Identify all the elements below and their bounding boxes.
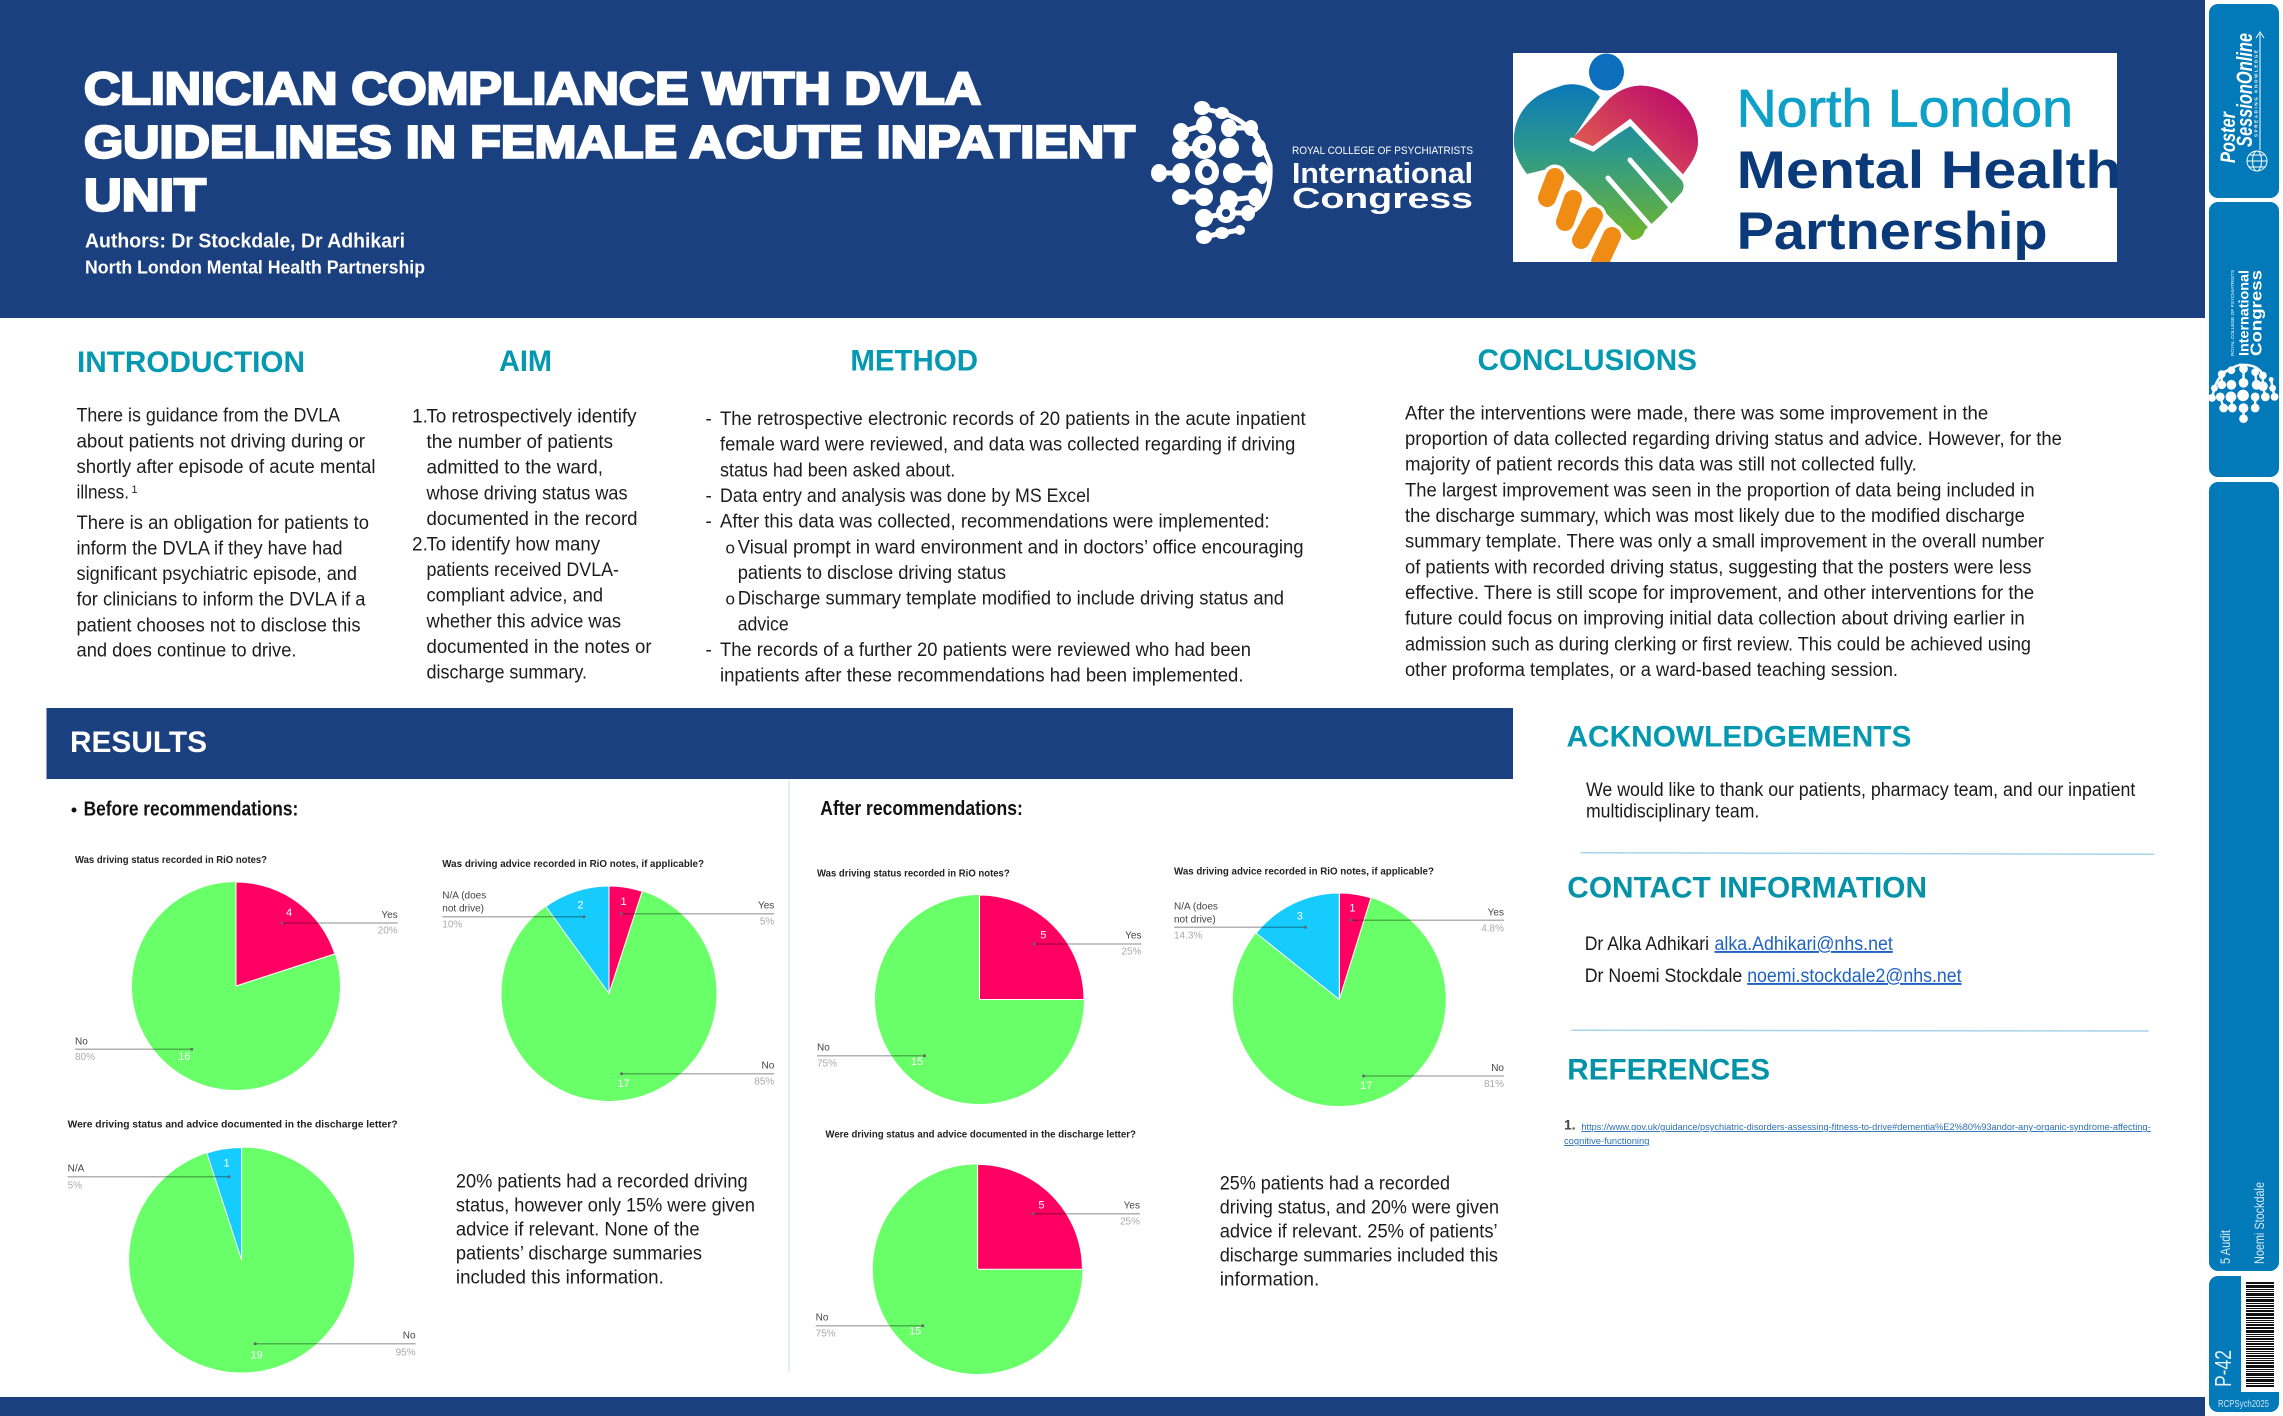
side tab: Poster Session Online (2209, 4, 2279, 198)
logo: RCPsych International Congress (1151, 101, 1473, 244)
text: after summary: discharge summaries included this (1220, 1245, 1498, 1266)
text: conclusions body: the discharge summary, which was most likely due to the modified discharge (1405, 506, 2025, 527)
text: method list: inpatients after these recommendations had been implemented. (720, 666, 1244, 687)
text: method list: - (706, 409, 712, 430)
text: aim list: admitted to the ward, (426, 458, 603, 479)
text: contact details: Dr Noemi Stockdale (1585, 966, 1742, 987)
results banner (46, 708, 1513, 779)
results banner: RESULTS (70, 726, 207, 759)
text: after summary: information. (1220, 1269, 1319, 1290)
side tab: International Congress (2208, 202, 2279, 477)
text: after summary: 25% patients had a recorded (1220, 1173, 1450, 1194)
text: before summary: advice if relevant. None of the (456, 1219, 700, 1240)
chart: before, driving advice recorded (442, 858, 775, 1101)
chart: before, driving advice recorded: 1 (621, 896, 627, 908)
chart: after, discharge letter (816, 1129, 1140, 1374)
text: method list: The retrospective electronic records of 20 patients in the acute inpatient (720, 409, 1306, 430)
poster title: UNIT (84, 170, 206, 221)
text: introduction body: shortly after episode of acute mental (76, 457, 376, 478)
text: conclusions body: After the interventions were made, there was some improvement in the (1405, 403, 1988, 424)
text: aim list: documented in the record (426, 509, 638, 530)
chart: after, discharge letter: Were driving status and advice documented in the discharge letter? (825, 1129, 1136, 1141)
chart: before, driving status recorded: Yes (381, 910, 398, 921)
text: introduction body: patient chooses not to disclose this (76, 615, 360, 636)
panel: acknowledgements: ACKNOWLEDGEMENTS (1566, 721, 1911, 754)
footer band (0, 1397, 2205, 1416)
chart: before, discharge letter: 19 (250, 1349, 263, 1361)
poster title: GUIDELINES IN FEMALE ACUTE INPATIENT (84, 116, 1135, 167)
chart: before, driving advice recorded: No (762, 1061, 775, 1072)
text: method list: female ward were reviewed, and data was collected regarding if driving (720, 435, 1295, 456)
chart: before, driving advice recorded: 5% (760, 917, 774, 928)
chart: after, driving advice recorded: 14.3% (1174, 930, 1202, 941)
chart: before, discharge letter: Were driving status and advice documented in the discharge letter? (68, 1119, 398, 1131)
text: introduction body: There is an obligation for patients to (76, 513, 369, 534)
text: aim list (412, 406, 652, 684)
text: introduction body: about patients not driving during or (76, 431, 366, 452)
logo wordmark: Mental Health (1737, 141, 2122, 200)
chart: before, driving advice recorded: 85% (754, 1077, 774, 1088)
panel: contact information (1567, 871, 1962, 987)
side tab: International Congress: ROYAL COLLEGE OF PSYCHIATRISTS (2230, 270, 2235, 356)
chart: before, driving status recorded: 20% (378, 926, 398, 937)
chart: after, driving status recorded: 15 (911, 1056, 923, 1068)
chart: after, driving advice recorded: not drive) (1174, 915, 1216, 926)
chart: before, driving advice recorded: Was driving advice recorded in RiO notes, if applicable? (442, 858, 704, 870)
text: reference link: cognitive-functioning (1564, 1136, 1649, 1147)
text: after summary: advice if relevant. 25% of patients’ (1220, 1221, 1498, 1242)
text: acknowledgements body (1586, 780, 2136, 822)
icon: handshake heart (1514, 54, 1698, 262)
chart: before, driving advice recorded: N/A (does (442, 891, 486, 902)
heading: after recommendations: After recommendations: (820, 798, 1023, 820)
chart: after, driving advice recorded: 17 (1360, 1080, 1372, 1092)
text: before summary: 20% patients had a recorded driving (456, 1171, 748, 1192)
header banner (0, 0, 2205, 318)
text: aim list: documented in the notes or (426, 637, 652, 658)
text: introduction body: significant psychiatric episode, and (76, 564, 357, 585)
text: method list: o (726, 538, 735, 557)
text: after summary: driving status, and 20% were given (1220, 1197, 1499, 1218)
text: acknowledgements body: We would like to thank our patients, pharmacy team, and our inpatient (1586, 780, 2136, 801)
chart: after, driving status recorded: 25% (1121, 947, 1142, 958)
chart: after, driving advice recorded: N/A (does (1174, 902, 1218, 913)
logo: RCPsych International Congress: ROYAL COLLEGE OF PSYCHIATRISTS (1292, 145, 1473, 157)
text: method list: Data entry and analysis was done by MS Excel (720, 486, 1090, 507)
text: introduction body: inform the DVLA if they have had (76, 539, 342, 560)
text: aim list: To retrospectively identify (426, 406, 637, 427)
barcode (2246, 1282, 2274, 1387)
text: method list: status had been asked about. (720, 460, 955, 481)
text: method list: advice (738, 614, 789, 635)
side tab: International Congress: International (2236, 270, 2252, 356)
logo wordmark: Partnership (1737, 202, 2048, 261)
side tab: poster number and barcode (2209, 1276, 2279, 1412)
chart: after, driving status recorded: 5 (1040, 930, 1046, 942)
text: after summary (1220, 1173, 1499, 1290)
text: aim list: To identify how many (426, 534, 600, 555)
heading: conclusions: CONCLUSIONS (1478, 344, 1697, 377)
text: method list: - (706, 486, 712, 507)
heading: introduction: INTRODUCTION (77, 346, 305, 379)
text: method list: Discharge summary template modified to include driving status and (738, 589, 1284, 610)
chart: after, driving advice recorded: 81% (1484, 1079, 1504, 1090)
chart: after, driving advice recorded: 1 (1349, 902, 1355, 914)
text: method list (706, 409, 1306, 687)
logo: RCPsych International Congress: International (1292, 158, 1473, 190)
chart: before, driving status recorded: 4 (286, 907, 292, 919)
heading: aim: AIM (499, 345, 552, 378)
heading: before recommendations: Before recommendations: (84, 799, 298, 821)
text: introduction body (76, 406, 376, 662)
logo: North London Mental Health Partnership (1513, 53, 2122, 262)
chart: after, driving advice recorded: Yes (1488, 907, 1504, 918)
text: method list: patients to disclose driving status (738, 563, 1006, 584)
chart: before, driving advice recorded: 10% (442, 920, 462, 931)
chart: after, driving status recorded (817, 867, 1142, 1104)
text: contact details (1585, 934, 1962, 987)
chart: after, driving advice recorded (1174, 865, 1504, 1106)
text: before summary: included this information. (456, 1267, 664, 1288)
panel: contact information: CONTACT INFORMATION (1567, 871, 1927, 904)
text: conclusions body: summary template. There was only a small improvement in the overall number (1405, 532, 2045, 553)
chart: after, driving advice recorded: Was driving advice recorded in RiO notes, if applicable? (1174, 865, 1434, 877)
text: introduction body: illness. (76, 482, 129, 503)
text: reference link: https://www.gov.uk/guidance/psychiatric-disorders-assessing-fitness-to-drive#dementia%E2%80%93andor-any-organic-syndrome-affecting- (1581, 1122, 2151, 1133)
text: method list: - (706, 640, 712, 661)
text: method list: Visual prompt in ward environment and in doctors’ office encouraging (738, 537, 1304, 558)
authors (85, 230, 425, 277)
chart: before, driving advice recorded: not drive) (442, 903, 484, 914)
text: reference link (1564, 1116, 2151, 1147)
panel: method (706, 345, 1306, 687)
text: conclusions body: effective. There is still scope for improvement, and other interventions for the (1405, 583, 2034, 604)
panel: introduction (76, 346, 376, 662)
chart: before, driving status recorded: No (75, 1037, 88, 1048)
chart: before, driving status recorded: 80% (75, 1052, 95, 1063)
chart: after, driving status recorded: Was driving status recorded in RiO notes? (817, 867, 1010, 879)
chart: after, driving advice recorded: No (1491, 1063, 1504, 1074)
text: aim list: patients received DVLA- (426, 560, 619, 581)
panel: acknowledgements (1566, 721, 2136, 822)
text: aim list: whether this advice was (426, 611, 621, 632)
chart: after, driving advice recorded: 4.8% (1481, 923, 1504, 934)
text: method list: The records of a further 20 patients were reviewed who had been (720, 640, 1251, 661)
side tab: category and author: 5 Audit (2218, 1230, 2233, 1264)
chart: after, driving status recorded: Yes (1125, 931, 1142, 942)
chart: before, driving advice recorded: 17 (617, 1078, 630, 1090)
text: conclusions body: The largest improvement was seen in the proportion of data being included in (1405, 480, 2035, 501)
text: introduction body: and does continue to drive. (76, 641, 296, 662)
chart: after, driving status recorded: 75% (817, 1059, 837, 1070)
text: conclusions body (1405, 403, 2062, 681)
text: aim list: 2. (412, 534, 428, 555)
text: method list: - (706, 512, 712, 533)
text: aim list: the number of patients (426, 432, 613, 453)
chart: before, discharge letter: 5% (68, 1180, 82, 1191)
text: conclusions body: proportion of data collected regarding driving status and advice. However, for the (1405, 429, 2062, 450)
text: contact details: noemi.stockdale2@nhs.net (1747, 966, 1962, 987)
text: conclusions body: other proforma templates, or a ward-based teaching session. (1405, 660, 1898, 681)
text: aim list: discharge summary. (426, 663, 587, 684)
text: conclusions body: of patients with recorded driving status, suggesting that the posters were less (1405, 557, 2032, 578)
chart: before, discharge letter: 95% (396, 1347, 416, 1358)
side tab: Poster Session Online: Poster (2217, 111, 2240, 163)
text: reference link: 1. (1564, 1116, 1576, 1132)
panel: conclusions (1405, 344, 2062, 681)
chart: before, driving status recorded: 16 (178, 1051, 191, 1063)
panel: references (1564, 1054, 2151, 1147)
side tab: poster number and barcode: P-42 (2210, 1350, 2236, 1387)
side tab: International Congress: Congress (2248, 270, 2266, 356)
logo wordmark (1737, 80, 2122, 261)
side tab: category and author: Noemi Stockdale (2252, 1182, 2267, 1264)
chart: after, driving status recorded: No (817, 1043, 830, 1054)
text: contact details: Dr Alka Adhikari (1585, 934, 1709, 955)
chart: before, driving status recorded (75, 854, 398, 1090)
text: acknowledgements body: multidisciplinary team. (1586, 801, 1759, 822)
chart: before, discharge letter: N/A (68, 1163, 85, 1174)
text: before summary: patients’ discharge summaries (456, 1243, 702, 1264)
chart: after, discharge letter: Yes (1124, 1201, 1140, 1212)
logo: RCPsych International Congress: Congress (1292, 183, 1473, 215)
text: conclusions body: future could focus on improving initial data collection about driving earlier in (1405, 609, 2025, 630)
chart: before, discharge letter: No (403, 1330, 416, 1341)
chart: before, discharge letter (68, 1119, 416, 1372)
side tab: category and author (2209, 482, 2279, 1271)
chart: after, discharge letter: 15 (909, 1326, 921, 1338)
chart: before, driving status recorded: Was driving status recorded in RiO notes? (75, 854, 267, 866)
chart: before, driving advice recorded: Yes (758, 901, 774, 912)
text: conclusions body: admission such as during clerking or first review. This could be achieved using (1405, 634, 2031, 655)
panel: references: REFERENCES (1567, 1054, 1770, 1087)
chart: after, discharge letter: 5 (1038, 1199, 1044, 1211)
text: method list: After this data was collected, recommendations were implemented: (720, 512, 1270, 533)
poster title: CLINICIAN COMPLIANCE WITH DVLA (84, 63, 981, 114)
chart: after, discharge letter: 75% (816, 1328, 836, 1339)
chart: before, discharge letter: 1 (224, 1158, 230, 1170)
side tab: Poster Session Online: SPREADING KNOWLEDGE (2254, 50, 2258, 137)
chart: after, discharge letter: 25% (1120, 1217, 1140, 1228)
text: aim list: compliant advice, and (426, 586, 603, 607)
text: introduction body: for clinicians to inform the DVLA if a (76, 590, 366, 611)
chart: after, discharge letter: No (816, 1313, 829, 1324)
chart: before, driving advice recorded: 2 (577, 900, 583, 912)
text: aim list: whose driving status was (426, 483, 628, 504)
heading: method: METHOD (850, 345, 978, 378)
poster title (84, 63, 1135, 221)
authors: Authors: Dr Stockdale, Dr Adhikari (85, 230, 405, 252)
logo wordmark: North London (1737, 80, 2073, 139)
text: introduction body: There is guidance from the DVLA (76, 406, 340, 427)
chart: after, driving advice recorded: 3 (1297, 910, 1303, 922)
text: introduction body: 1 (132, 484, 138, 496)
panel: aim (412, 345, 652, 684)
text: before summary (456, 1171, 755, 1288)
text: before summary: status, however only 15% were given (456, 1196, 755, 1217)
text: aim list: 1. (412, 406, 428, 427)
text: conclusions body: majority of patient records this data was still not collected fully. (1405, 455, 1917, 476)
text: method list: o (726, 590, 735, 609)
authors: North London Mental Health Partnership (85, 257, 425, 277)
text: contact details: alka.Adhikari@nhs.net (1714, 934, 1893, 955)
